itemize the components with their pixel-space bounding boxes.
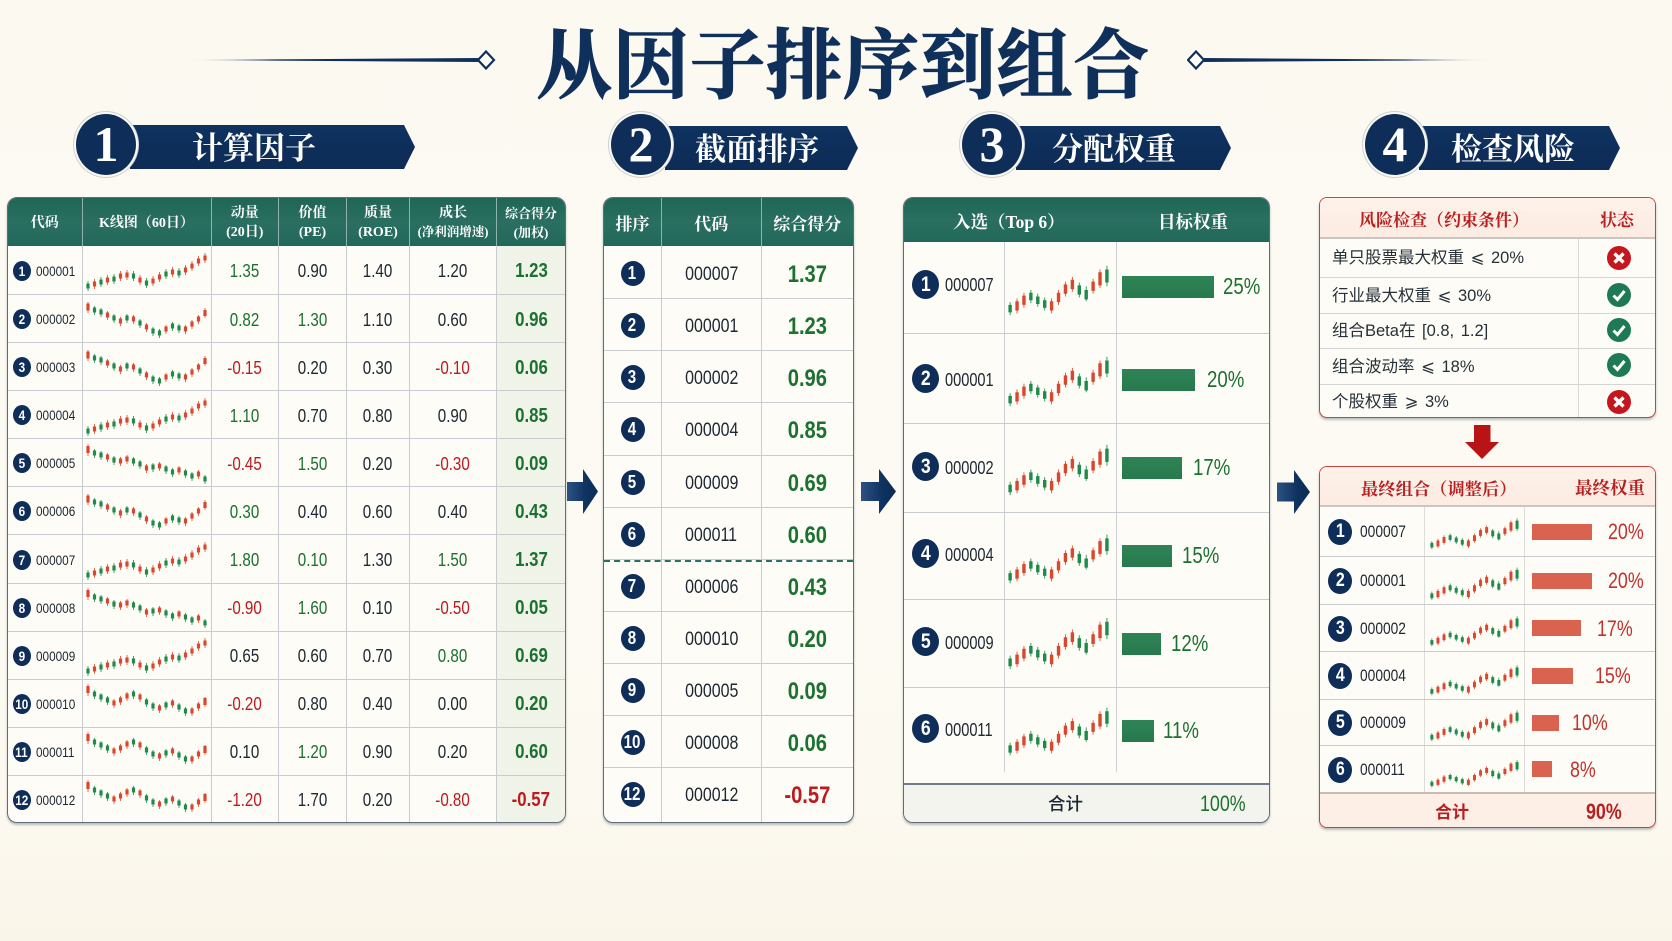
step 4 heading: 检查风险 <box>1451 124 1575 169</box>
table rows: 000003 <box>36 359 75 375</box>
table rows: 0.20 <box>438 742 468 762</box>
table rows: 1.40 <box>363 261 393 281</box>
step 2 heading <box>608 111 858 178</box>
final row 000011: 8% <box>1570 757 1596 782</box>
table rows: 000006 <box>36 503 75 519</box>
ranking rows: 8 <box>628 628 637 648</box>
ranking rows: 000008 <box>685 733 738 754</box>
ranking rows: 000012 <box>685 785 738 806</box>
table rows: 000011 <box>36 744 74 760</box>
risk header: 风险检查（约束条件） <box>1359 206 1529 231</box>
ranking rows: 000002 <box>685 368 738 389</box>
table rows: 0.20 <box>515 693 547 715</box>
table header <box>904 198 1269 242</box>
table rows: -0.50 <box>436 598 470 618</box>
table rows: 1 <box>18 263 25 279</box>
final row 000004 <box>1320 651 1655 699</box>
ranking rows: 2 <box>628 315 637 335</box>
ranking rows: 1.37 <box>788 261 827 288</box>
table rows: 1.30 <box>363 550 393 570</box>
weight row 000002 <box>904 423 1269 512</box>
step 2 heading: 截面排序 <box>695 124 819 169</box>
title ornament: right line <box>1187 50 1478 70</box>
table rows: 1.20 <box>438 261 468 281</box>
table rows: 0.90 <box>298 261 327 281</box>
ranking rows <box>604 246 853 822</box>
table rows: 000012 <box>36 792 75 808</box>
table rows: -0.57 <box>512 789 550 811</box>
title ornament: left line <box>202 50 496 70</box>
table header <box>8 198 565 246</box>
panel: target weights <box>903 197 1270 823</box>
ranking rows: 0.20 <box>788 626 827 653</box>
table rows: 0.80 <box>298 694 327 714</box>
risk header: 状态 <box>1600 206 1634 231</box>
table header: (加权) <box>514 225 548 240</box>
table rows: 000001 <box>36 263 75 279</box>
table rows: 9 <box>18 648 25 664</box>
final row 000009: 10% <box>1572 710 1608 735</box>
table header: 成长 <box>439 206 467 221</box>
ranking rows: 7 <box>628 576 637 596</box>
table header: 代码 <box>31 216 59 230</box>
panel: factor table <box>7 197 566 823</box>
table rows: 6 <box>18 503 25 519</box>
ranking rows: 6 <box>628 524 637 544</box>
arrow: step 1 to 2 <box>567 469 598 514</box>
ranking rows: 000006 <box>685 577 738 598</box>
table rows: 1.10 <box>230 406 259 426</box>
table rows: -0.20 <box>228 694 262 714</box>
table rows: 0.20 <box>363 790 393 810</box>
weight row 000007: 000007 <box>945 275 994 295</box>
weight row 000002: 000002 <box>945 458 994 478</box>
final row 000001 <box>1320 556 1655 604</box>
table rows: 4 <box>18 407 25 423</box>
table header: 目标权重 <box>1158 212 1228 232</box>
weight row 000009: 000009 <box>945 633 994 653</box>
final row 000002: 3 <box>1336 618 1344 639</box>
table rows: 0.10 <box>230 742 259 762</box>
table rows: 1.30 <box>298 310 327 330</box>
ranking rows: 000004 <box>685 420 738 441</box>
table rows: 0.40 <box>438 502 468 522</box>
table rows: 1.23 <box>515 260 547 282</box>
table rows: 0.10 <box>298 550 327 570</box>
table rows: 8 <box>18 600 25 616</box>
arrow: step 3 to 4 <box>1277 470 1310 514</box>
table header: 综合得分 <box>505 206 557 221</box>
total row: 100% <box>1200 791 1246 816</box>
panel: risk check <box>1319 197 1656 418</box>
table rows: 000008 <box>36 600 75 616</box>
table header: 动量 <box>231 206 259 221</box>
table header: 价值 <box>298 206 326 221</box>
weight row 000001: 000001 <box>945 370 994 390</box>
final row 000007: 000007 <box>1360 522 1406 541</box>
table rows: -0.80 <box>436 790 470 810</box>
final header <box>1320 467 1655 507</box>
table rows: 1.50 <box>298 454 327 474</box>
table header: 入选（Top 6） <box>953 212 1065 232</box>
ranking rows: 1.23 <box>788 313 827 340</box>
final row 000004: 4 <box>1336 665 1344 686</box>
table rows: 0.70 <box>298 406 327 426</box>
table rows: 0.60 <box>438 310 468 330</box>
arrow: step 2 to 3 <box>861 469 896 514</box>
table rows: 0.65 <box>230 646 259 666</box>
table rows: -0.90 <box>228 598 262 618</box>
step 3 heading: 3 <box>980 116 1004 172</box>
final row 000004: 15% <box>1595 663 1631 688</box>
table rows: 1.35 <box>230 261 259 281</box>
table rows: 1.70 <box>298 790 327 810</box>
top 6 cut-off dashed line <box>604 560 853 562</box>
table rows: -0.45 <box>228 454 262 474</box>
weight row 000004: 15% <box>1182 542 1219 568</box>
ranking rows: 000011 <box>685 525 737 546</box>
weight row 000004 <box>904 512 1269 599</box>
table header: 综合得分 <box>773 214 841 234</box>
table header: (净利润增速) <box>418 225 488 239</box>
table rows: -0.10 <box>436 358 470 378</box>
final row 000009 <box>1320 699 1655 745</box>
check: max single stock weight <box>1332 246 1631 270</box>
step 1 heading <box>73 111 415 178</box>
step 3 heading: 分配权重 <box>1052 124 1176 169</box>
table rows: 5 <box>18 455 25 471</box>
weight row 000009: 5 <box>921 630 930 652</box>
ranking rows: 9 <box>628 680 637 700</box>
weight row 000001: 20% <box>1207 366 1244 392</box>
table header: 质量 <box>364 206 392 221</box>
table rows: 11 <box>15 744 28 760</box>
table rows: 0.20 <box>363 454 393 474</box>
table rows: 0.60 <box>363 502 393 522</box>
ranking rows: 3 <box>628 367 637 387</box>
final row 000001: 2 <box>1336 570 1344 591</box>
check: max industry weight: 行业最大权重 ⩽ 30% <box>1332 287 1491 305</box>
final row 000007 <box>1328 518 1644 550</box>
weight row 000011 <box>904 687 1269 783</box>
final total row: 合计 <box>1435 798 1469 823</box>
ranking rows: -0.57 <box>784 782 830 809</box>
table rows: 0.90 <box>438 406 468 426</box>
step 4 heading: 4 <box>1382 116 1408 172</box>
final header: 最终权重 <box>1575 475 1645 500</box>
table rows: 1.20 <box>298 742 327 762</box>
table rows: -0.30 <box>436 454 470 474</box>
weight row 000009 <box>904 599 1269 687</box>
final row 000007: 1 <box>1336 521 1344 542</box>
check: min stock weight <box>1320 384 1655 419</box>
final row 000011: 6 <box>1336 759 1344 780</box>
table rows: 2 <box>18 311 25 327</box>
final row 000002: 000002 <box>1360 619 1406 638</box>
table rows: 7 <box>18 552 25 568</box>
weight row 000011: 6 <box>921 716 930 740</box>
check: portfolio volatility <box>1320 348 1655 384</box>
final total row <box>1320 792 1655 827</box>
table rows: 0.30 <box>363 358 393 378</box>
weight row 000007: 25% <box>1223 273 1260 299</box>
table rows: 0.70 <box>363 646 393 666</box>
table rows: 0.96 <box>515 309 547 331</box>
table rows: 1.10 <box>363 310 393 330</box>
table rows: 0.60 <box>298 646 327 666</box>
weight row 000002: 3 <box>921 454 930 478</box>
table rows: 000007 <box>36 552 75 568</box>
final row 000009: 000009 <box>1360 713 1406 732</box>
table rows: 3 <box>18 359 25 375</box>
final row 000011: 000011 <box>1360 760 1405 779</box>
weight row 000004: 000004 <box>945 545 994 565</box>
table rows: 1.60 <box>298 598 327 618</box>
ranking rows: 0.43 <box>788 574 827 601</box>
final header: 最终组合（调整后） <box>1361 475 1517 500</box>
ranking rows: 1 <box>628 263 637 283</box>
table rows: 0.40 <box>363 694 393 714</box>
table rows: 12 <box>15 792 28 808</box>
check: max single stock weight: 单只股票最大权重 ⩽ 20% <box>1332 249 1524 267</box>
check: max industry weight <box>1320 277 1655 313</box>
final total row: 90% <box>1586 799 1622 824</box>
table rows: 0.09 <box>515 453 547 475</box>
table rows: 0.00 <box>438 694 468 714</box>
table rows: 0.05 <box>515 597 547 619</box>
total row: 合计 <box>1048 791 1083 816</box>
table rows: 0.85 <box>515 405 547 427</box>
final row 000007: 20% <box>1608 519 1644 544</box>
arrow: risk check to final portfolio <box>1465 425 1499 459</box>
final row 000004: 000004 <box>1360 666 1406 685</box>
table rows: 10 <box>15 696 28 712</box>
weight row 000004: 4 <box>921 542 930 564</box>
weight row 000002: 17% <box>1193 454 1230 480</box>
final row 000011 <box>1320 745 1655 792</box>
panel: ranking table <box>603 197 854 823</box>
weight row 000001 <box>904 333 1269 423</box>
title: 从因子排序到组合 <box>536 5 1150 114</box>
table rows <box>8 246 565 822</box>
table rows: 0.30 <box>230 502 259 522</box>
table rows: 0.80 <box>438 646 468 666</box>
step 1 heading: 1 <box>94 116 118 172</box>
table header: (ROE) <box>358 225 398 240</box>
table header: K线图（60日） <box>99 216 194 230</box>
check: portfolio beta: 组合Beta在 [0.8, 1.2] <box>1332 322 1488 340</box>
ranking rows: 0.69 <box>788 470 827 497</box>
step 1 heading: 计算因子 <box>192 123 316 168</box>
table header: 代码 <box>694 214 728 234</box>
table rows: 1.37 <box>515 549 547 571</box>
final row 000002: 17% <box>1597 616 1633 641</box>
table rows: 0.60 <box>515 741 547 763</box>
table rows: 000010 <box>36 696 75 712</box>
ranking rows: 0.85 <box>788 417 827 444</box>
ranking rows: 4 <box>628 419 637 439</box>
table rows: 0.10 <box>363 598 393 618</box>
ranking rows: 10 <box>624 732 641 752</box>
weight row 000007 <box>912 266 1260 316</box>
final row 000002 <box>1320 604 1655 651</box>
ranking rows: 0.06 <box>788 730 827 757</box>
table rows: 0.82 <box>230 310 259 330</box>
final row 000001: 20% <box>1608 568 1644 593</box>
ranking rows: 000007 <box>685 264 738 285</box>
weight row 000001: 2 <box>921 366 930 390</box>
ranking rows: 0.60 <box>788 522 827 549</box>
weight row 000007: 1 <box>921 272 930 296</box>
risk header <box>1320 198 1655 239</box>
table header: 排序 <box>616 214 650 234</box>
table rows: 0.40 <box>298 502 327 522</box>
table header: (PE) <box>299 225 326 240</box>
total row <box>904 783 1269 822</box>
table rows: 0.20 <box>298 358 327 378</box>
table rows: 0.69 <box>515 645 547 667</box>
weight row 000011: 000011 <box>945 720 993 740</box>
table rows: 0.43 <box>515 501 547 523</box>
check: min stock weight: 个股权重 ⩾ 3% <box>1332 393 1449 411</box>
table rows: 1.80 <box>230 550 259 570</box>
table rows: 000005 <box>36 455 75 471</box>
step 4 heading <box>1362 111 1620 178</box>
table rows: 000004 <box>36 407 75 423</box>
table rows: 0.80 <box>363 406 393 426</box>
table rows: -0.15 <box>228 358 262 378</box>
weight row 000009: 12% <box>1171 630 1208 656</box>
table header: (20日) <box>226 225 263 240</box>
panel: final portfolio <box>1319 466 1656 828</box>
ranking rows: 5 <box>628 472 637 492</box>
table rows: 000009 <box>36 648 75 664</box>
table rows: 0.90 <box>363 742 393 762</box>
ranking rows: 000005 <box>685 681 738 702</box>
table rows: -1.20 <box>228 790 262 810</box>
weight row 000011: 11% <box>1163 717 1199 743</box>
final row 000009: 5 <box>1336 712 1344 733</box>
ranking rows: 000009 <box>685 473 738 494</box>
final row 000001: 000001 <box>1360 571 1406 590</box>
table rows: 0.06 <box>515 357 547 379</box>
ranking rows: 000010 <box>685 629 738 650</box>
ranking rows: 0.96 <box>788 365 827 392</box>
ranking rows: 0.09 <box>788 678 827 705</box>
check: portfolio beta <box>1320 313 1655 348</box>
ranking rows: 000001 <box>685 316 738 337</box>
table rows: 1.50 <box>438 550 468 570</box>
step 3 heading <box>959 111 1231 178</box>
ranking rows: 12 <box>624 784 641 804</box>
table header <box>604 198 853 246</box>
step 2 heading: 2 <box>628 116 654 172</box>
table rows: 000002 <box>36 311 75 327</box>
check: portfolio volatility: 组合波动率 ⩽ 18% <box>1332 358 1475 376</box>
